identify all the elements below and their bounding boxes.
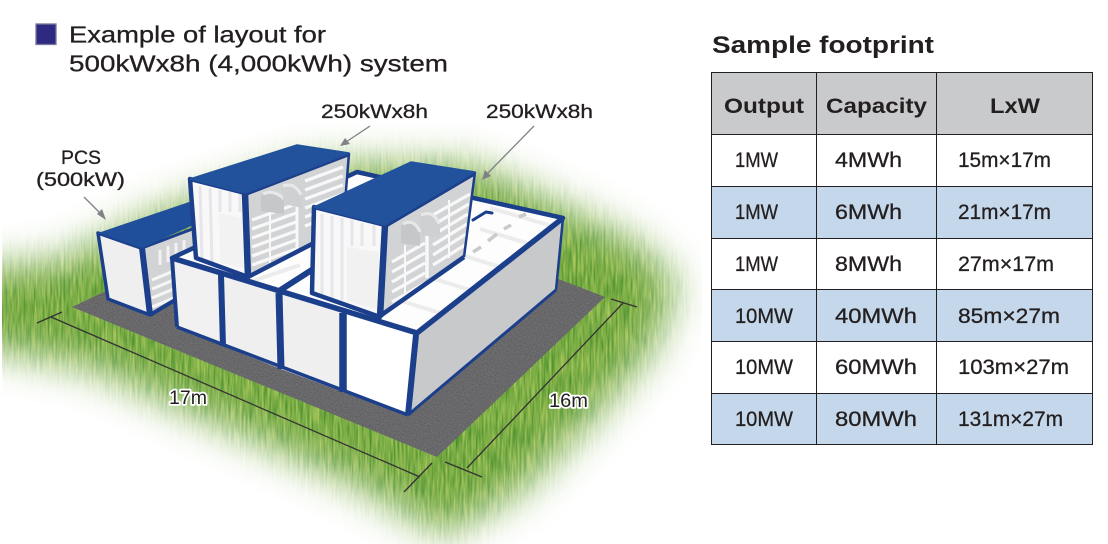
table header: LxW: [990, 95, 1040, 118]
legend: layout example: [36, 22, 448, 76]
table row 6: [712, 394, 1092, 444]
label: 250kWx8h left: 250kWx8h: [321, 102, 428, 123]
base right face: [408, 218, 563, 415]
gravel pad: [72, 200, 605, 457]
table row 3: 8MWh: [835, 253, 902, 276]
table row 2: 6MWh: [835, 201, 902, 224]
table row 5: [712, 342, 1092, 394]
PCS container: [98, 201, 200, 315]
table row 6: 80MWh: [835, 408, 917, 431]
table row 5: 60MWh: [835, 356, 917, 379]
table row 3: [712, 238, 1092, 290]
base roof: [172, 172, 563, 333]
arrow: container A: [340, 126, 370, 146]
table row 4: [712, 290, 1092, 342]
table row 1: 4MWh: [835, 149, 902, 172]
table row 1: [712, 134, 1092, 186]
dimension line: 17m: [37, 312, 432, 492]
arrow: container B: [482, 126, 534, 180]
table row 5: 10MW: [735, 356, 793, 379]
table row 1: 1MW: [735, 149, 778, 172]
table row 4: 10MW: [735, 305, 793, 328]
dimension line: 16m: [445, 299, 637, 477]
legend text: Example of layout for: [69, 22, 326, 48]
table row 4: 40MWh: [835, 305, 917, 328]
table row 6: 10MW: [735, 408, 793, 431]
label: 250kWx8h right: 250kWx8h: [486, 102, 593, 123]
label: PCS: (500kW): [36, 170, 125, 191]
table row 2: 21m×17m: [958, 201, 1051, 224]
base front panels: [172, 258, 223, 346]
label: PCS: PCS: [61, 148, 101, 169]
table header: [712, 72, 1092, 134]
table row 3: 27m×17m: [958, 253, 1054, 276]
arrow: PCS: [84, 197, 106, 220]
container B: 250kWx8h: [312, 162, 475, 317]
roof rails: [172, 172, 563, 291]
heading: sample footprint: Sample footprint: [712, 32, 934, 59]
label: PCS: [36, 148, 125, 191]
isometric site illustration: [2, 100, 702, 544]
table row 2: [712, 186, 1092, 238]
table row 5: 103m×27m: [958, 356, 1069, 379]
container A: 250kWx8h: [190, 145, 349, 277]
table header: Output: [724, 95, 804, 118]
table row 1: 15m×17m: [958, 149, 1051, 172]
icon: duct: [401, 213, 440, 246]
icon: legend square: [36, 24, 56, 44]
legend text: [69, 22, 448, 76]
table row 3: 1MW: [735, 253, 778, 276]
table: sample footprint: [712, 72, 1092, 444]
battery base row: [172, 172, 563, 415]
table row 6: 131m×27m: [958, 408, 1063, 431]
legend text: 500kWx8h (4,000kWh) system: [69, 50, 448, 76]
label: 17m: 17m: [169, 388, 207, 409]
label: 16m: 16m: [549, 391, 588, 412]
grass ground: [2, 100, 702, 544]
table row 2: 1MW: [735, 201, 778, 224]
table header: Capacity: [826, 95, 927, 118]
icon: duct: [261, 184, 302, 214]
table row 4: 85m×27m: [958, 305, 1060, 328]
